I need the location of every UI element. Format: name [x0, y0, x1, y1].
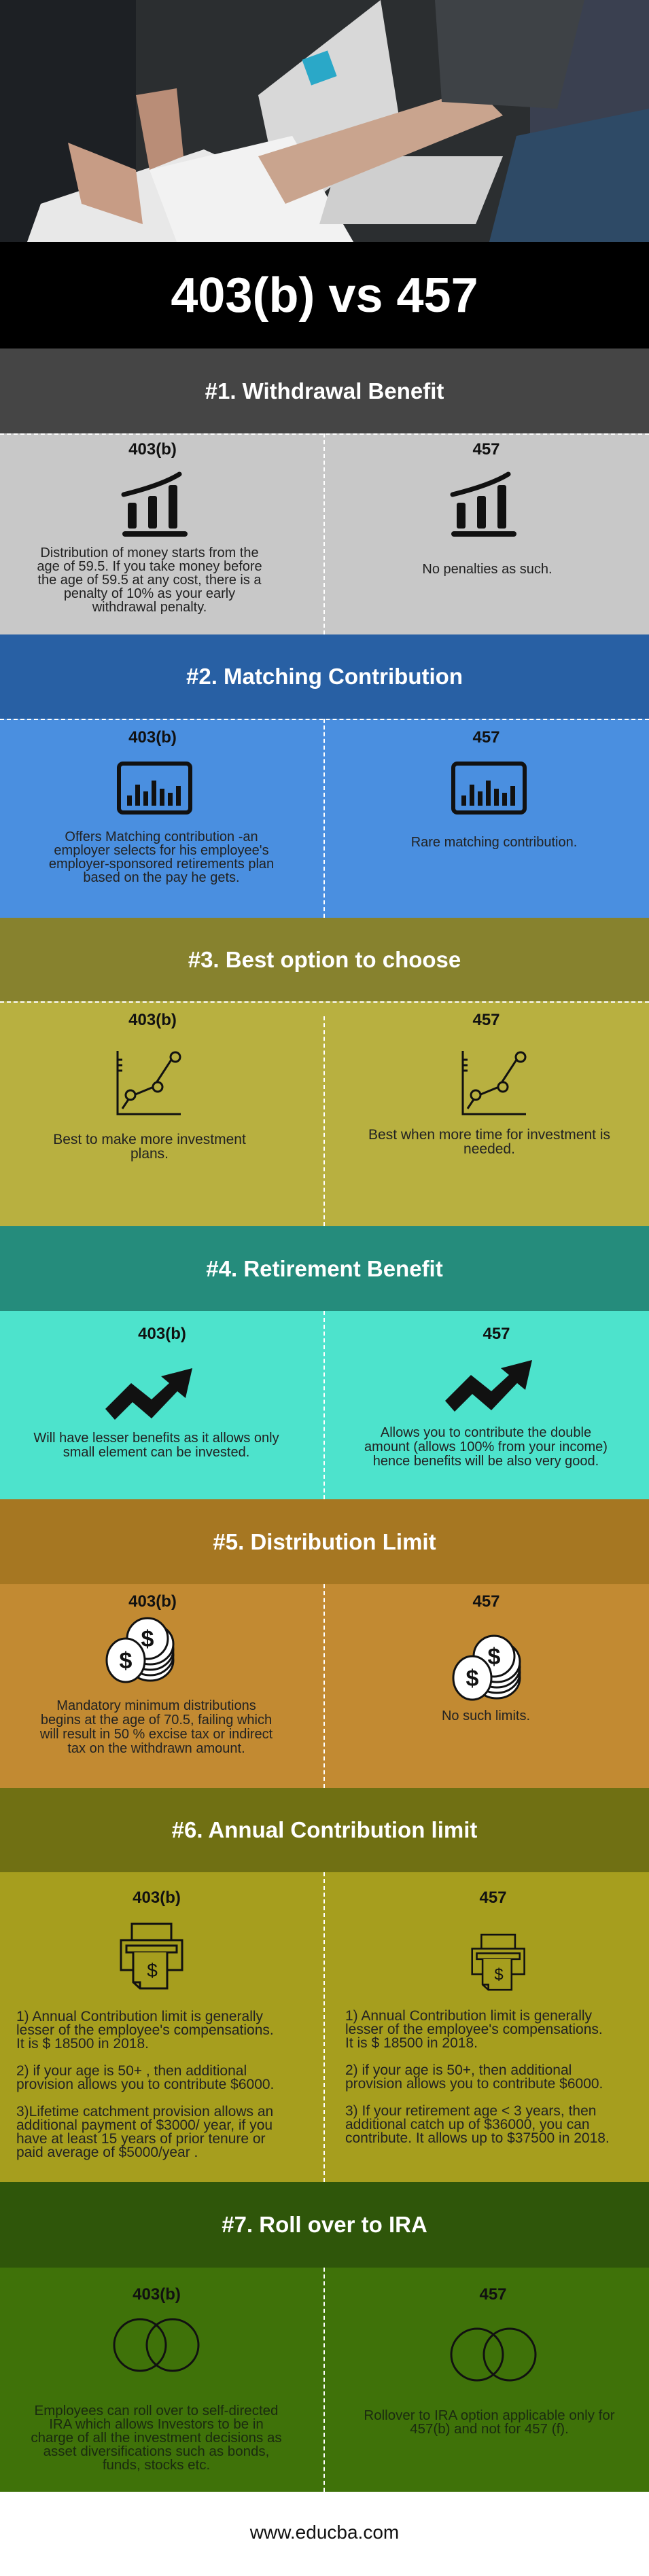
- text: 457 contribution limit: provision allows you to contribute $6000.: [345, 2076, 603, 2092]
- title band: 403(b) vs 457: [171, 268, 478, 322]
- text: 403(b) retirement: small element can be invested.: [63, 1445, 249, 1460]
- text: 403(b) contribution limit: 3)Lifetime catchment provision allows an: [16, 2104, 273, 2119]
- text: 403(b) contribution limit: lesser of the employee's compensations.: [16, 2022, 274, 2038]
- header: #5: #5. Distribution Limit: [213, 1528, 436, 1554]
- panel: annual contribution limit: [0, 1872, 649, 2182]
- text: 457 best option: needed.: [463, 1141, 515, 1157]
- panel: distribution limit: [0, 1584, 649, 1788]
- label 403(b): 403(b): [128, 1011, 177, 1029]
- text: 403(b) rollover: charge of all the investment decisions as: [31, 2430, 282, 2446]
- label 457: 457: [472, 440, 500, 459]
- text: 457 contribution limit: additional catch up of $36000, you can: [345, 2117, 590, 2132]
- header: #4: [0, 1226, 649, 1311]
- text: 403(b) distribution: Mandatory minimum distributions: [56, 1698, 256, 1713]
- text: 403(b) rollover: funds, stocks etc.: [103, 2457, 210, 2473]
- icon: overlapping circles: [450, 2327, 537, 2382]
- label 403(b): 403(b): [128, 1592, 177, 1611]
- label 457: 457: [472, 1592, 500, 1611]
- title band: [0, 242, 649, 348]
- text: 403(b) contribution limit: It is $ 18500 in 2018.: [16, 2036, 149, 2052]
- text: 403(b) distribution: will result in 50 % excise tax or indirect: [40, 1727, 273, 1742]
- icon: coins: $: [488, 1644, 501, 1670]
- icon: coins: $: [466, 1666, 479, 1692]
- header: #2: #2. Matching Contribution: [186, 664, 463, 689]
- icon: printer with bill: $: [494, 1966, 504, 1984]
- text: 403(b) matching: Offers Matching contribution -an: [65, 829, 258, 844]
- header: #3: #3. Best option to choose: [188, 947, 461, 971]
- text: 457 contribution limit: [345, 2008, 610, 2146]
- text: 403(b) rollover: IRA which allows Investors to be in: [49, 2416, 264, 2432]
- text: 457 contribution limit: It is $ 18500 in 2018.: [345, 2035, 478, 2051]
- text: 403(b) withdrawal: withdrawal penalty.: [92, 600, 207, 615]
- text: 403(b) matching: employer selects for his employee's: [54, 843, 269, 858]
- text: 457 rollover: [364, 2408, 615, 2437]
- icon: bar chart growth: [121, 471, 188, 537]
- text: 457 contribution limit: 3) If your retirement age < 3 years, then: [345, 2103, 596, 2119]
- label 457: 457: [472, 728, 500, 747]
- header: #4: #4. Retirement Benefit: [206, 1255, 443, 1281]
- icon: printer with bill: [120, 1922, 183, 1989]
- icon: printer with bill: $: [147, 1960, 158, 1981]
- icon: zigzag arrow: [105, 1368, 192, 1420]
- panel: matching contribution: [0, 719, 649, 918]
- icon: line graph: [462, 1051, 526, 1115]
- icon: printer with bill: [471, 1933, 525, 1990]
- text: 403(b) contribution limit: 1) Annual Contribution limit is generally: [16, 2009, 263, 2024]
- icon: coins: [453, 1634, 521, 1701]
- label 403(b): 403(b): [133, 1889, 181, 1907]
- footer: website: www.educba.com: [250, 2522, 399, 2543]
- header: #7: [0, 2182, 649, 2268]
- text: 403(b) rollover: Employees can roll over to self-directed: [35, 2403, 278, 2418]
- text: 457 distribution: No such limits.: [442, 1709, 530, 1723]
- text: 403(b) distribution: [39, 1698, 273, 1756]
- panel: withdrawal benefit: [0, 433, 649, 634]
- header: #3: [0, 918, 649, 1001]
- icon: coins: $: [141, 1626, 154, 1652]
- icon: chart screen: [117, 762, 192, 815]
- icon: overlapping circles: [113, 2318, 200, 2372]
- text: 403(b) retirement: Will have lesser benefits as it allows only: [33, 1431, 279, 1446]
- text: 457 best option: [368, 1127, 610, 1157]
- text: 403(b) best option: plans.: [130, 1146, 169, 1162]
- text: 457 withdrawal: No penalties as such.: [422, 562, 552, 577]
- icon: bar chart growth: [450, 471, 516, 537]
- panel: retirement benefit: [0, 1311, 649, 1499]
- text: 403(b) distribution: tax on the withdrawn amount.: [67, 1741, 245, 1756]
- header: #2: [0, 634, 649, 719]
- text: 403(b) contribution limit: 2) if your age is 50+ , then additional: [16, 2063, 247, 2079]
- hero photo: [0, 0, 649, 242]
- text: 403(b) matching: [49, 829, 274, 885]
- text: 403(b) contribution limit: have at least 15 years of prior tenure or: [16, 2131, 266, 2147]
- text: 457 best option: Best when more time for investment is: [368, 1127, 610, 1143]
- text: 403(b) contribution limit: [16, 2009, 274, 2160]
- header: #1: [0, 348, 649, 433]
- text: 457 retirement: [364, 1425, 608, 1469]
- text: 457 rollover: 457(b) and not for 457 (f).: [410, 2421, 569, 2437]
- text: 403(b) best option: [53, 1132, 246, 1162]
- text: 403(b) withdrawal: age of 59.5. If you take money before: [37, 559, 262, 574]
- text: 457 contribution limit: contribute. It allows up to $37500 in 2018.: [345, 2130, 610, 2146]
- text: 457 matching: Rare matching contribution.: [411, 835, 577, 850]
- text: 403(b) withdrawal: [37, 545, 262, 615]
- panel: best option: [0, 1001, 649, 1226]
- text: 403(b) rollover: asset diversifications such as bonds,: [43, 2444, 269, 2459]
- text: 403(b) withdrawal: the age of 59.5 at any cost, there is a: [37, 573, 262, 588]
- text: 403(b) retirement: [33, 1431, 279, 1460]
- text: 403(b) rollover: [31, 2403, 282, 2473]
- label 457: 457: [479, 1889, 507, 1907]
- text: 403(b) contribution limit: provision allows you to contribute $6000.: [16, 2077, 274, 2092]
- icon: zigzag arrow: [445, 1360, 532, 1412]
- label 403(b): 403(b): [138, 1325, 186, 1343]
- label 403(b): 403(b): [133, 2285, 181, 2304]
- label 403(b): 403(b): [128, 728, 177, 747]
- header: #6: #6. Annual Contribution limit: [172, 1817, 477, 1842]
- text: 457 contribution limit: lesser of the employee's compensations.: [345, 2022, 603, 2037]
- label 457: 457: [483, 1325, 510, 1343]
- panel: roll over to IRA: [0, 2268, 649, 2492]
- text: 403(b) matching: employer-sponsored retirements plan: [49, 857, 274, 872]
- text: 457 rollover: Rollover to IRA option applicable only for: [364, 2408, 615, 2423]
- header: #5: [0, 1499, 649, 1584]
- header: #6: [0, 1788, 649, 1872]
- label 457: 457: [472, 1011, 500, 1029]
- text: 403(b) contribution limit: paid average of $5000/year .: [16, 2145, 198, 2160]
- icon: coins: $: [120, 1648, 133, 1674]
- text: 403(b) distribution: begins at the age of 70.5, failing which: [41, 1713, 272, 1728]
- header: #1: #1. Withdrawal Benefit: [205, 378, 444, 404]
- icon: chart screen: [451, 762, 527, 815]
- text: 457 contribution limit: 1) Annual Contribution limit is generally: [345, 2008, 592, 2024]
- text: 403(b) matching: based on the pay he gets.: [83, 870, 240, 885]
- label 403(b): 403(b): [128, 440, 177, 459]
- label 457: 457: [479, 2285, 507, 2304]
- header: #7: #7. Roll over to IRA: [222, 2212, 427, 2237]
- text: 457 retirement: amount (allows 100% from your income): [364, 1439, 608, 1454]
- text: 403(b) withdrawal: penalty of 10% as your early: [64, 586, 235, 601]
- text: 457 retirement: Allows you to contribute the double: [381, 1425, 591, 1440]
- icon: line graph: [117, 1051, 181, 1115]
- text: 403(b) contribution limit: additional payment of $3000/ year, if you: [16, 2117, 273, 2133]
- text: 403(b) best option: Best to make more investment: [53, 1132, 246, 1147]
- text: 457 retirement: hence benefits will be also very good.: [373, 1454, 599, 1469]
- icon: coins: [106, 1617, 174, 1683]
- text: 403(b) withdrawal: Distribution of money starts from the: [40, 545, 259, 560]
- text: 457 contribution limit: 2) if your age is 50+, then additional: [345, 2062, 572, 2078]
